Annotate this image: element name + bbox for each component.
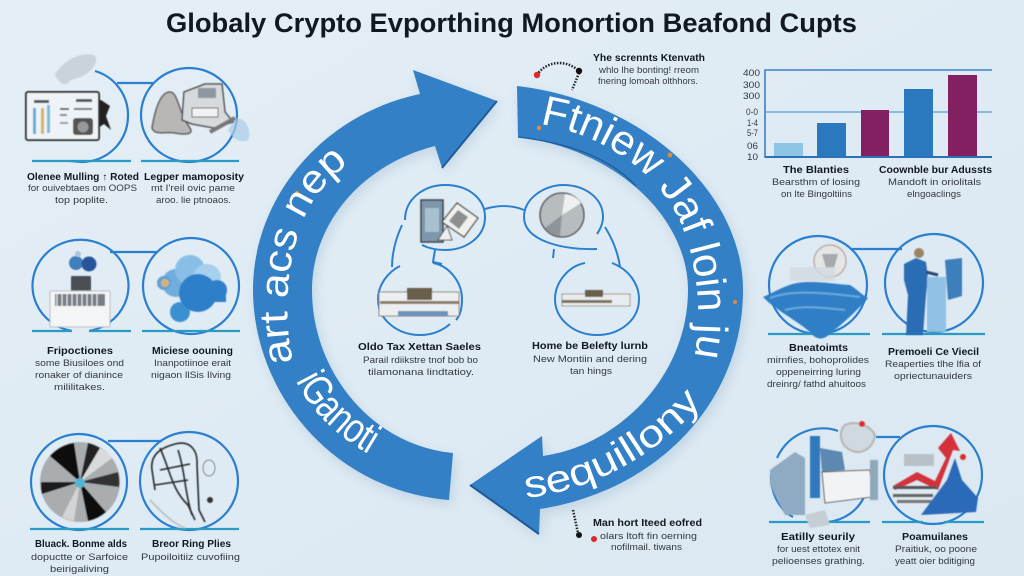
y-axis labels [743, 68, 760, 163]
heading: Miciese oouning [152, 346, 233, 357]
text block: mirnfies, bohoprolides [767, 355, 869, 366]
icon: keyboard and globes [50, 251, 110, 327]
icon: red growth arrow [893, 433, 978, 515]
y-axis labels: 300 [743, 91, 760, 102]
y-axis labels: 0-0 [746, 107, 758, 118]
icon: wheel [40, 442, 120, 522]
y-axis labels: 1-4 [747, 118, 758, 129]
text block: Pupoiloitiiz cuvofiing [141, 552, 240, 563]
callout: bottom: olars ltoft fin oerning [600, 531, 697, 542]
y-axis labels: 10 [747, 152, 758, 163]
left arrow label lower: iGanoti [296, 368, 382, 453]
icon: line-art figure [150, 443, 215, 528]
y-axis labels: 400 [743, 68, 760, 79]
text block: opriectunauiders [894, 371, 972, 382]
text block: for uest ettotex enit [777, 544, 860, 555]
text block: Parail rdiikstre tnof bob bo [363, 355, 478, 366]
icon: device left [379, 288, 459, 316]
icon: blue pillow [763, 245, 868, 338]
panel: left row 1 [26, 54, 249, 206]
heading: Bneatoimts [789, 343, 848, 354]
right arrow label upper: Ftniew Jaf loin ju [543, 96, 729, 358]
icon: office machine [770, 421, 878, 528]
y-axis labels: 06 [747, 141, 758, 152]
callout: top: Yhe scrennts Ktenvath [593, 53, 705, 64]
panel: right row 2 [763, 234, 985, 390]
text block: Mandoft in oriolitals [888, 177, 981, 188]
panel: bar chart [743, 68, 992, 200]
callout: bottom: nofilmail. tiwans [611, 542, 682, 553]
text block: dopuctte or Sarfoice [31, 552, 128, 563]
text block: tilamonana lindtatioy. [368, 367, 474, 378]
text block: yeatt oier bditiging [895, 556, 975, 567]
text block [31, 552, 128, 575]
right arrow label lower: sequillony [526, 389, 698, 498]
title: Globaly Crypto Evporthing Monortion Beafond Cupts [166, 8, 857, 38]
icon: tablet dashboard [26, 54, 111, 140]
text block: pelioenses grathing. [772, 556, 865, 567]
text block: tan hings [570, 366, 612, 377]
text block: mt I'reil ovic pame [151, 183, 235, 194]
y-axis labels: 300 [743, 80, 760, 91]
heading: Fripoctiones [47, 346, 113, 357]
callout: top: fnering lomoah olthhors. [598, 76, 698, 87]
text block: some Biusiloes ond [35, 358, 124, 369]
callout: bottom [573, 510, 702, 553]
panel: left row 2 [32, 238, 240, 393]
text block: Bearsthm of losing [772, 177, 860, 188]
heading: Coownble bur Adussts [879, 165, 992, 176]
text block [772, 544, 865, 567]
callout: top: whlo lhe bonting! rreom [598, 65, 699, 76]
text block [888, 177, 981, 200]
text block: oppeneirring luring [776, 367, 861, 378]
text block: Reaperties tlhe lfia of [885, 359, 981, 370]
text block [35, 358, 124, 393]
bars [774, 75, 977, 156]
heading: Poamuilanes [902, 532, 968, 543]
text block: aroo. lie ptnoaos. [156, 195, 231, 206]
left cycle arrow [252, 70, 499, 507]
heading: Olenee Mulling ↑ Roted [27, 172, 139, 183]
text block [767, 355, 869, 390]
text block [895, 544, 977, 567]
icon: documents [421, 200, 478, 242]
text block: New Montiin and dering [533, 354, 647, 365]
icon: cloud [157, 255, 227, 322]
text block [885, 359, 981, 382]
text block [28, 183, 137, 206]
text block: on lte Bingoltiins [781, 189, 852, 200]
icon: clock dial [540, 193, 584, 237]
text block: top poplite. [55, 195, 108, 206]
right cycle arrow [469, 86, 750, 536]
panel: left row 3 [30, 432, 240, 575]
text block: Praitiuk, oo poone [895, 544, 977, 555]
text block: dreinrg/ fathd ahuitoos [767, 379, 866, 390]
icon: machinery [152, 84, 249, 141]
callout: top [534, 53, 705, 90]
heading: Premoeli Ce Viecil [888, 347, 979, 358]
heading: Legper mamoposity [144, 172, 244, 183]
text block [772, 177, 860, 200]
text block: nigaon llSis Ilving [151, 370, 231, 381]
text block [151, 358, 231, 381]
text block: ronaker of dianince [35, 370, 123, 381]
text block: Inanpotiinoe erait [154, 358, 231, 369]
left arrow label upper: art acs nep [262, 151, 344, 362]
heading: Breor Ring Plies [152, 539, 231, 550]
panel: right row 3 [769, 421, 984, 567]
heading: The Blanties [783, 165, 849, 176]
y-axis labels: 5-7 [747, 128, 758, 139]
text block [363, 355, 478, 378]
heading: Eatilly seurily [781, 532, 855, 543]
heading: Home be Belefty lurnb [532, 341, 648, 352]
text block: mililitakes. [54, 382, 105, 393]
heading: Bluack. Bonme alds [35, 539, 127, 550]
text block: elngoaclings [907, 189, 961, 200]
heading: Oldo Tax Xettan Saeles [358, 342, 481, 353]
panel: centre diagram [358, 185, 648, 378]
text block [533, 354, 647, 377]
text block [151, 183, 235, 206]
text block: for ouivebtaes om OOPS [28, 183, 137, 194]
connectors [378, 185, 639, 335]
icon: device right [562, 290, 630, 306]
callout: bottom: Man hort Iteed eofred [593, 518, 702, 529]
icon: person with cart [904, 248, 962, 335]
text block: beirigaliving [50, 564, 109, 575]
